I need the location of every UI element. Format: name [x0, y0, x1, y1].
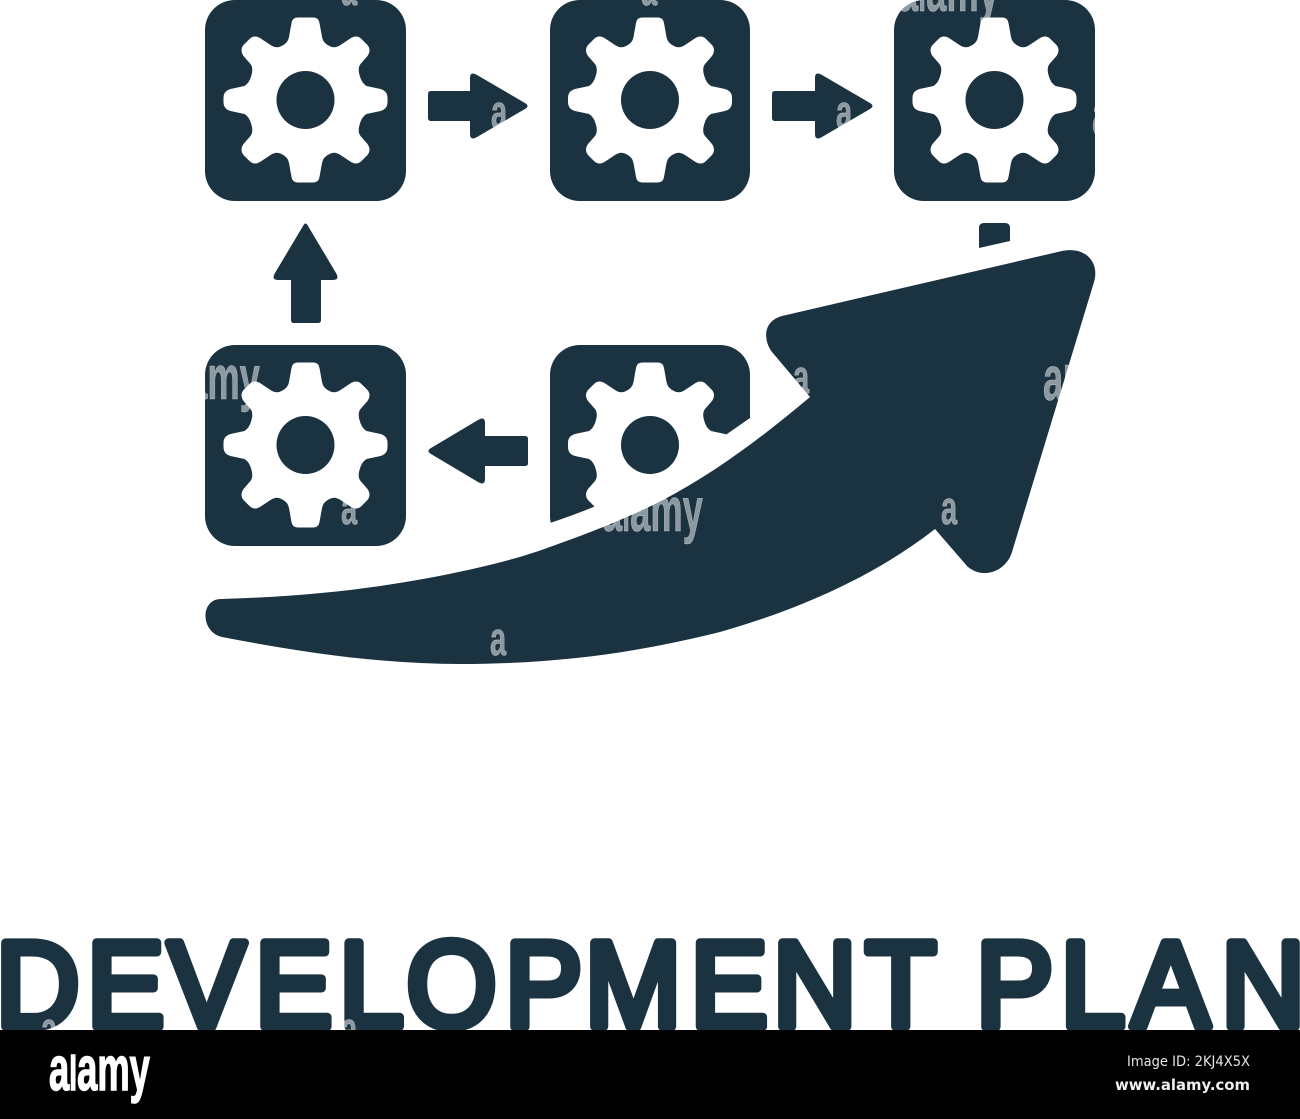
watermark overlays: a — [491, 87, 507, 139]
watermark overlays: a — [41, 1004, 57, 1056]
growth arrow — [206, 250, 1095, 664]
icon: gear box top middle — [550, 0, 750, 201]
footer bar — [0, 1030, 1300, 1119]
watermark overlays: a — [490, 614, 506, 666]
title: DEVELOPMENT PLAN — [0, 917, 1300, 1053]
arrow: top left to top middle — [428, 74, 528, 138]
arrow: top middle to top right — [772, 74, 872, 138]
connector stub under top right box — [979, 223, 1010, 248]
watermark overlays: a — [793, 352, 809, 404]
arrow: bottom middle to bottom left — [428, 419, 528, 483]
watermark overlays: a — [341, 1004, 357, 1056]
watermark overlays: alamy — [159, 343, 260, 412]
arrow: up from bottom left box — [274, 224, 337, 323]
icon: gear box top right — [894, 0, 1095, 201]
icon: gear box top left — [205, 0, 406, 201]
icon: gear box bottom left — [205, 345, 406, 546]
watermark overlays: alamy — [1092, 79, 1193, 148]
icon: gear box bottom middle, cut by growth arrow — [540, 345, 830, 565]
watermark overlays: a — [341, 483, 357, 535]
watermark overlays: a — [941, 483, 957, 535]
watermark overlays: alamy — [1043, 344, 1144, 413]
footer logo: alamy — [49, 1034, 150, 1103]
website: www.alamy.com — [1115, 1076, 1250, 1094]
watermark overlays: a — [836, 87, 852, 139]
watermark overlays: alamy — [602, 475, 703, 544]
image id: Image ID: 2KJ4X5X — [1127, 1054, 1250, 1070]
